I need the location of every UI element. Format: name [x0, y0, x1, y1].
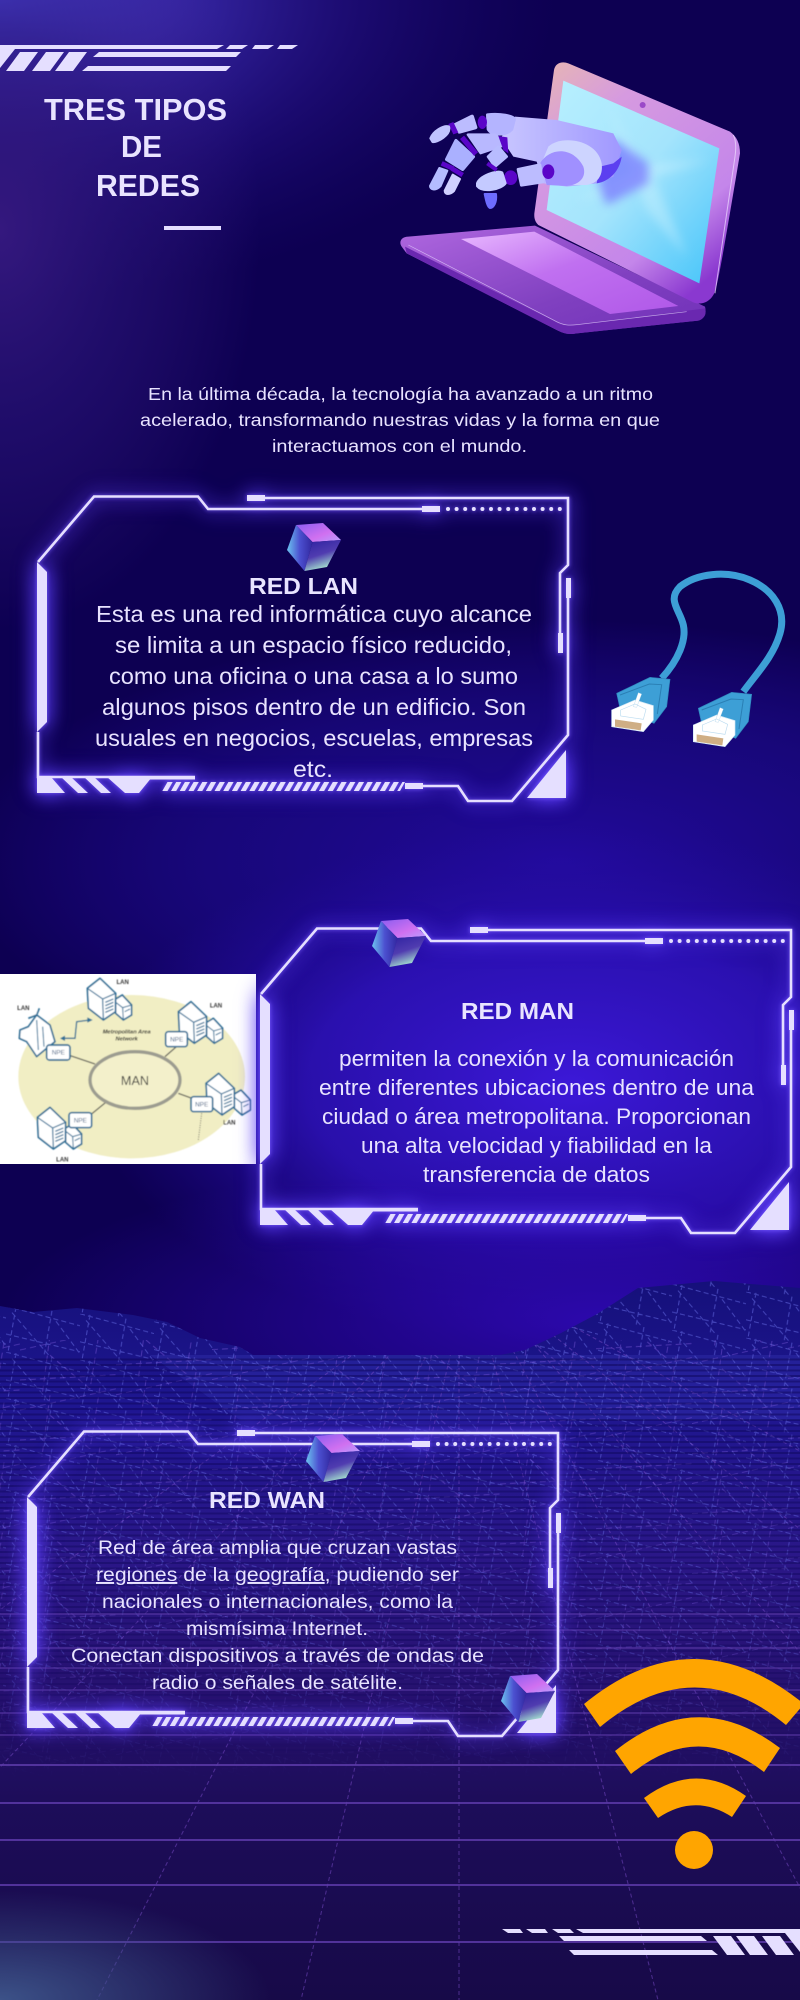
title: TRES TIPOS — [44, 92, 227, 127]
robotic hand — [430, 114, 648, 208]
text block: RED LAN: algunos pisos dentro de un edificio. Son — [102, 694, 526, 720]
background: wireframe terrain and grid floor — [0, 1270, 800, 2000]
title: DE — [121, 129, 162, 164]
title: REDES — [96, 168, 200, 203]
intro text: acelerado, transformando nuestras vidas y la forma en que — [140, 410, 660, 430]
text block: RED WAN: regiones de la geografía , pudiendo ser — [96, 1564, 460, 1586]
panel: RED MAN — [260, 919, 794, 1233]
text block: RED WAN: radio o señales de satélite. — [152, 1672, 403, 1694]
title underline — [164, 226, 221, 230]
icon: wifi — [584, 1659, 800, 1869]
title — [44, 92, 227, 203]
image: MAN network diagram: Metropolitan Area — [103, 1029, 151, 1035]
intro text: interactuamos con el mundo. — [272, 436, 527, 456]
text block: RED MAN: ciudad o área metropolitana. Proporcionan — [322, 1104, 751, 1129]
panel: RED WAN — [27, 1430, 561, 1736]
icon: cube — [287, 523, 341, 571]
text block: RED WAN: Red de área amplia que cruzan vastas — [98, 1537, 457, 1559]
intro text — [140, 384, 660, 456]
text block: RED WAN: mismísima Internet. — [186, 1618, 368, 1640]
image: MAN network diagram: LAN — [117, 980, 129, 986]
image: MAN network diagram: MAN — [121, 1074, 149, 1088]
text block: RED LAN: Esta es una red informática cuyo alcance — [96, 601, 532, 627]
image: MAN network diagram: NPE — [170, 1036, 183, 1043]
image: MAN network diagram: Network — [116, 1037, 139, 1043]
illustration: laptop with robotic hand — [400, 62, 740, 334]
text block: RED WAN: Conectan dispositivos a través de ondas de — [71, 1645, 484, 1667]
decorative stripes: top left — [0, 45, 298, 71]
image: MAN network diagram: LAN — [56, 1158, 68, 1164]
text block: RED LAN: como una oficina o una casa a lo sumo — [109, 663, 518, 689]
heading: RED LAN: RED LAN — [249, 573, 358, 599]
image: MAN network diagram: NPE — [52, 1050, 65, 1057]
image: MAN network diagram: LAN — [210, 1004, 222, 1010]
icon: cube bottom right — [501, 1674, 555, 1722]
heading: RED MAN: RED MAN — [461, 998, 574, 1024]
text block: RED LAN: etc. — [293, 756, 333, 782]
text block: RED MAN — [319, 1046, 755, 1187]
image: MAN network diagram: NPE — [195, 1101, 208, 1108]
image: MAN network diagram: NPE — [74, 1117, 87, 1124]
text block: RED MAN: permiten la conexión y la comunicación — [339, 1046, 734, 1071]
icon: cube — [372, 919, 426, 967]
text block: RED WAN: nacionales o internacionales, como la — [102, 1591, 453, 1613]
text block: RED LAN: usuales en negocios, escuelas, empresas — [95, 725, 533, 751]
text block: RED MAN: transferencia de datos — [423, 1162, 650, 1187]
text block: RED LAN: se limita a un espacio físico reducido, — [115, 632, 512, 658]
text block: RED MAN: una alta velocidad y fiabilidad en la — [361, 1133, 713, 1158]
icon: cube — [306, 1434, 360, 1482]
image: MAN network diagram — [0, 974, 256, 1164]
intro text: En la última década, la tecnología ha avanzado a un ritmo — [148, 384, 653, 404]
text block: RED MAN: entre diferentes ubicaciones dentro de una — [319, 1075, 755, 1100]
image: MAN network diagram: LAN — [17, 1006, 29, 1012]
heading: RED WAN: RED WAN — [209, 1487, 325, 1513]
image: MAN network diagram: LAN — [223, 1120, 235, 1126]
decorative stripes: bottom right — [502, 1929, 800, 1955]
icon: ethernet cable — [612, 574, 782, 747]
panel: RED LAN — [37, 495, 571, 801]
text block: RED LAN — [95, 601, 533, 782]
text block: RED WAN — [71, 1537, 484, 1694]
